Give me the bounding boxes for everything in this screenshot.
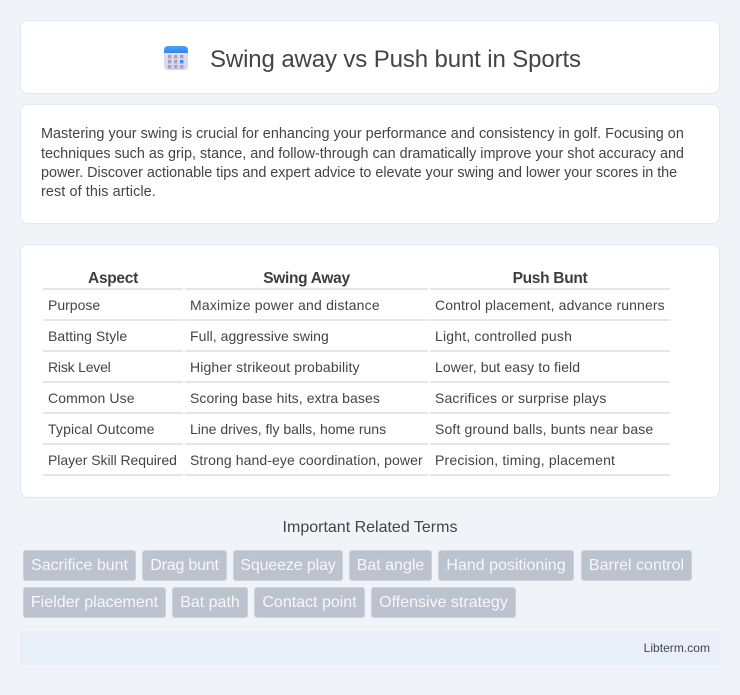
row: Risk Level [43,359,670,383]
panel: introduction [20,104,720,224]
row: Purpose: Maximize power and distance [190,297,380,313]
row: Risk Level: Risk Level [48,359,111,375]
intro text: rest of this article. [41,184,156,200]
tag: Squeeze play [240,557,336,574]
tag [371,587,516,618]
tag [349,550,432,581]
icon: calendar [164,46,188,70]
panel: title header [20,20,720,94]
row: Batting Style: Full, aggressive swing [190,328,329,344]
row: Purpose [43,297,670,321]
tag [233,550,343,581]
row: Risk Level: Lower, but easy to field [435,359,580,375]
tag [23,550,136,581]
intro text: power. Discover actionable tips and expert advice to elevate your swing and lower your scores in the [41,165,677,181]
tag: Offensive strategy [379,594,508,611]
tag: Bat angle [357,557,424,574]
row: Batting Style: Batting Style [48,328,127,344]
row: Purpose: Purpose [48,297,100,313]
panel: comparison table [20,244,720,498]
tag: Sacrifice bunt [31,557,128,574]
title: Swing away vs Push bunt in Sports [210,46,581,73]
row: Common Use: Common Use [48,390,135,406]
row: Typical Outcome [43,421,670,445]
row: Typical Outcome: Line drives, fly balls, home runs [190,421,386,437]
intro text: techniques such as grip, stance, and follow-through can dramatically improve your shot accuracy and [41,146,684,162]
row: Player Skill Required: Player Skill Required [48,452,177,468]
tag: Drag bunt [150,557,219,574]
tag: Fielder placement [31,594,158,611]
table header: Aspect [88,270,138,287]
tag [142,550,227,581]
tag: Hand positioning [446,557,566,574]
footer bar [20,631,720,665]
row: Batting Style [43,328,670,352]
row: Player Skill Required: Precision, timing, placement [435,452,615,468]
row: Common Use: Sacrifices or surprise plays [435,390,606,406]
row: Typical Outcome: Soft ground balls, bunts near base [435,421,653,437]
row: Purpose: Control placement, advance runners [435,297,665,313]
tag: Barrel control [589,557,684,574]
table header: Push Bunt [513,270,587,287]
tag: Bat path [180,594,240,611]
row: Batting Style: Light, controlled push [435,328,572,344]
row: Common Use [43,390,670,414]
tag [172,587,248,618]
row: Risk Level: Higher strikeout probability [190,359,360,375]
heading: related terms: Important Related Terms [283,519,457,536]
tag [23,587,166,618]
comparison table [43,270,670,476]
row: Player Skill Required [43,452,670,476]
table header [43,270,670,290]
intro text: Mastering your swing is crucial for enhancing your performance and consistency in golf. Focusing on [41,126,684,142]
row: Common Use: Scoring base hits, extra bases [190,390,380,406]
footer credit: Libterm.com [644,641,710,655]
intro text [41,126,684,200]
row: Player Skill Required: Strong hand-eye coordination, power [190,452,423,468]
tag [581,550,692,581]
related term tags [23,550,692,618]
row: Typical Outcome: Typical Outcome [48,421,155,437]
tag: Contact point [262,594,357,611]
tag [254,587,365,618]
table header: Swing Away [263,270,350,287]
tag [438,550,574,581]
